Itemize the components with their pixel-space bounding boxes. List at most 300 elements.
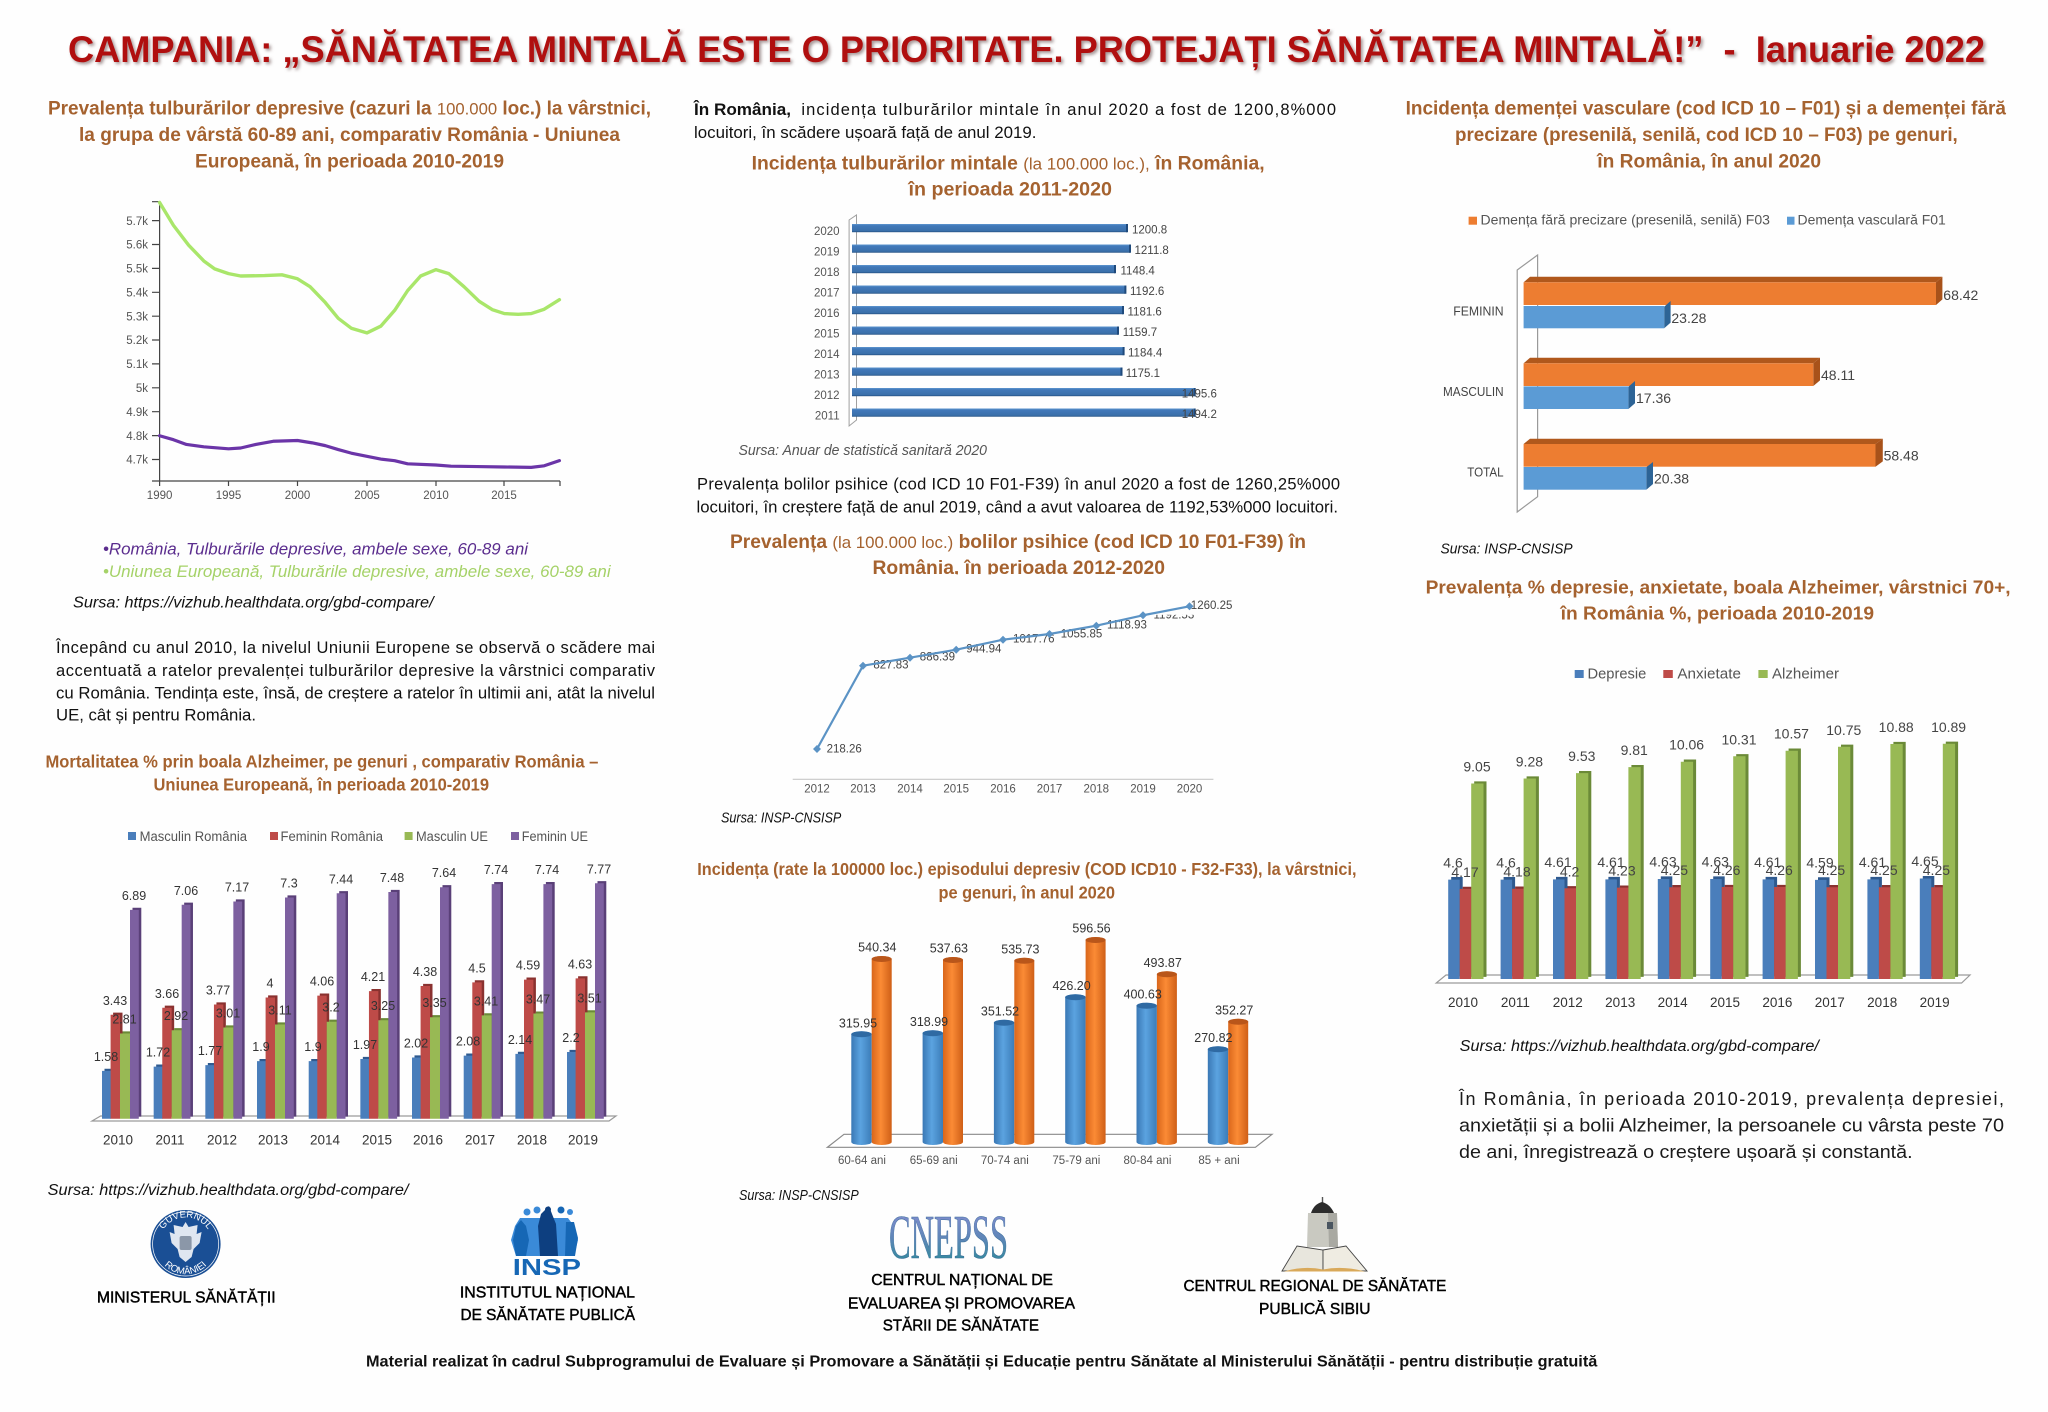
values: Feminin UE: 7.64 bbox=[432, 866, 456, 880]
source: Sursa: INSP-CNSISP bbox=[739, 1188, 859, 1204]
label: MINISTERUL SĂNĂTĂȚII bbox=[97, 1288, 276, 1307]
values: Feminin România: 4.59 bbox=[516, 959, 540, 973]
values: 23.28 bbox=[1671, 310, 1707, 326]
label bbox=[1184, 1276, 1446, 1318]
footer note: Material realizat în cadrul Subprogramului de Evaluare și Promovare a Sănătății și Educație pentru Sănătate al Ministerului Sănătății - pentru distribuție gratuită bbox=[366, 1354, 1598, 1371]
line chart: EU vs Romania: 5.5k bbox=[126, 264, 148, 276]
source: Sursa: Anuar de statistică sanitară 2020 bbox=[738, 443, 987, 459]
values: Feminin UE bbox=[122, 862, 611, 903]
values: 886.39 bbox=[920, 651, 955, 663]
values: Masculin UE: 3.35 bbox=[422, 996, 447, 1010]
heading: dementia: Incidența demenței vasculare (cod ICD 10 – F01) și a demenței fără bbox=[1406, 98, 2006, 119]
label: EVALUAREA ȘI PROMOVAREA bbox=[848, 1295, 1075, 1312]
values: 493.87 bbox=[1144, 956, 1182, 970]
bar chart: prevalence 70+ bbox=[1436, 719, 1970, 1010]
values: 1184.4 bbox=[1128, 347, 1163, 359]
axis: years: 2018 bbox=[1084, 784, 1109, 796]
line chart: EU vs Romania: 4.9k bbox=[126, 407, 148, 419]
values: Alzheimer: 9.81 bbox=[1621, 742, 1648, 758]
values: 48.11 bbox=[1821, 367, 1855, 383]
panel: psychiatric prevalence line chart bbox=[721, 532, 1306, 827]
line chart: EU vs Romania: 2010 bbox=[423, 490, 449, 502]
axis: years: 2017 bbox=[1037, 784, 1062, 796]
legend: Alzheimer chart bbox=[128, 829, 588, 844]
text block: conclusion: de ani, înregistrează o creștere ușoară și constantă. bbox=[1459, 1142, 1913, 1162]
icon: INSP people: INSP bbox=[513, 1254, 581, 1280]
values: Anxietate: 4.25 bbox=[1870, 862, 1898, 878]
values: Anxietate: 4.18 bbox=[1503, 864, 1531, 880]
axis: years bbox=[814, 226, 840, 422]
values: Masculin România bbox=[94, 1031, 580, 1064]
heading: psychiatric prevalence: România, în perioada 2012-2020 bbox=[872, 558, 1165, 579]
panel: mental disorders incidence bars bbox=[738, 153, 1265, 459]
axis: years: 2012 bbox=[804, 784, 830, 796]
axis: years: 2020 bbox=[814, 226, 840, 238]
heading: depressive episode: Incidența (rate la 100000 loc.) episodului depresiv (COD ICD10 - F32-F33), la vârstnici, bbox=[697, 859, 1356, 879]
values: Masculin UE bbox=[112, 991, 602, 1027]
values: 1017.76 bbox=[1013, 633, 1055, 645]
axis: years: 2018 bbox=[517, 1132, 547, 1147]
axis: years: 2014 bbox=[310, 1132, 341, 1147]
values: Masculin UE: 3.51 bbox=[577, 991, 602, 1005]
legend: line chart: •Uniunea Europeană, Tulburările depresive, ambele sexe, 60-89 ani bbox=[103, 563, 612, 581]
line chart: EU vs Romania: 5.4k bbox=[126, 288, 148, 300]
heading: prevalence 70+: în România %, perioada 2010-2019 bbox=[1560, 602, 1874, 623]
values: Depresie: 4.65 bbox=[1911, 853, 1939, 869]
values: 218.26 bbox=[827, 743, 862, 755]
logo block: INSP bbox=[460, 1206, 635, 1324]
heading: psychiatric prevalence bbox=[730, 532, 1306, 582]
axis: years: 2014 bbox=[897, 784, 923, 796]
values: Depresie: 4.63 bbox=[1702, 854, 1729, 870]
axis: age groups: 65-69 ani bbox=[910, 1155, 958, 1167]
values: Alzheimer: 9.53 bbox=[1568, 748, 1596, 764]
values: Feminin UE: 7.48 bbox=[380, 871, 404, 885]
legend: prevalence 70+ bbox=[1575, 667, 1839, 683]
legend: prevalence 70+: Depresie bbox=[1588, 667, 1646, 683]
heading: depressive disorders: Europeană, în perioada 2010-2019 bbox=[195, 152, 504, 173]
values: Depresie: 4.59 bbox=[1806, 854, 1834, 870]
values: Masculin UE: 3.01 bbox=[216, 1006, 240, 1020]
values: Anxietate: 4.17 bbox=[1451, 864, 1479, 880]
heading: depressive disorders: la grupa de vârstă 60-89 ani, comparativ România - Uniunea bbox=[79, 125, 620, 146]
values: Feminin UE: 7.3 bbox=[280, 876, 298, 890]
icon: government seal bbox=[150, 1210, 221, 1278]
title: CAMPANIA: „SĂNĂTATEA MINTALĂ ESTE O PRIORITATE. PROTEJAȚI SĂNĂTATEA MINTALĂ!” - Ianuarie 2022 bbox=[68, 29, 1985, 71]
axis: years: 2012 bbox=[814, 390, 840, 402]
values: Masculin UE: 3.2 bbox=[322, 1001, 340, 1015]
legend: prevalence 70+: Alzheimer bbox=[1772, 667, 1839, 683]
values: Alzheimer: 10.57 bbox=[1774, 726, 1809, 742]
text block: EU trend commentary: cu România. Tendința este, însă, de creștere a ratelor în ultimii ani, atât la nivelul bbox=[56, 684, 655, 702]
values bbox=[1120, 224, 1217, 421]
axis: years: 2012 bbox=[1553, 995, 1583, 1010]
icon: CNEPSS wordmark: CNEPSS bbox=[889, 1204, 1008, 1272]
text block: conclusion: anxietății și a bolii Alzheimer, la persoanele cu vârsta peste 70 bbox=[1459, 1115, 2004, 1135]
line chart: EU vs Romania: 5.3k bbox=[126, 311, 148, 323]
values: Feminin România: 4.63 bbox=[568, 957, 592, 971]
axis: years: 2014 bbox=[1658, 995, 1688, 1010]
values: Feminin România: 3.43 bbox=[103, 994, 127, 1008]
group: Total bbox=[1524, 439, 1883, 490]
axis: years bbox=[804, 784, 1202, 796]
values: Depresie: 4.61 bbox=[1859, 854, 1886, 870]
values: Masculin România: 1.97 bbox=[353, 1038, 377, 1052]
legend: line chart bbox=[103, 540, 612, 581]
group: Masculin bbox=[1524, 358, 1820, 409]
series: Feminin UE bbox=[130, 881, 606, 1119]
values: Alzheimer bbox=[1463, 719, 1966, 774]
axis: years: 2011 bbox=[155, 1132, 185, 1147]
line chart: EU vs Romania: 2015 bbox=[491, 490, 517, 502]
series: Masculin UE bbox=[120, 1010, 598, 1119]
text block: EU trend commentary: accentuată a ratelor prevalenței tulburărilor depresive la vârstnici comparativ bbox=[56, 662, 656, 680]
axis: years: 2015 bbox=[1710, 995, 1740, 1010]
values: Anxietate bbox=[1451, 862, 1950, 880]
panel: dementia horizontal bars bbox=[1406, 98, 2006, 557]
values: 351.52 bbox=[981, 1005, 1019, 1019]
heading: Alzheimer mortality bbox=[46, 752, 599, 795]
legend: Alzheimer chart: Masculin România bbox=[140, 829, 247, 844]
values: Masculin România: 1.77 bbox=[198, 1044, 222, 1058]
axis: years: 2016 bbox=[1762, 995, 1792, 1010]
values: Masculin România: 2.14 bbox=[508, 1033, 532, 1047]
cylinder chart: incidence by age bbox=[827, 922, 1272, 1167]
heading: mental disorders incidence: Incidența tulburărilor mintale (la 100.000 loc.), în România, bbox=[752, 153, 1265, 174]
icon: government seal: ROMÂNIEI bbox=[164, 1260, 206, 1274]
axis: age groups bbox=[838, 1155, 1240, 1167]
values: Feminin România: 4.38 bbox=[413, 965, 437, 979]
values: 17.36 bbox=[1636, 390, 1671, 406]
line chart: EU vs Romania: 1995 bbox=[216, 490, 241, 502]
axis: years: 2015 bbox=[814, 328, 840, 340]
text block: EU trend commentary: Începând cu anul 2010, la nivelul Uniunii Europene se observă o scădere mai bbox=[55, 638, 655, 657]
text block: conclusion: În România, în perioada 2010-2019, prevalența depresiei, bbox=[1458, 1089, 2004, 1109]
values: Masculin UE: 3.25 bbox=[371, 999, 395, 1013]
axis: years: 2019 bbox=[814, 246, 840, 258]
values: 1175.1 bbox=[1126, 368, 1160, 380]
axis: years: 2012 bbox=[207, 1132, 237, 1147]
logo block: Ministerul Sănătății bbox=[97, 1210, 276, 1307]
series: Masculin România bbox=[102, 1050, 578, 1119]
values: Masculin UE: 2.92 bbox=[164, 1009, 188, 1023]
values: Feminin UE: 7.74 bbox=[484, 863, 508, 877]
source: Sursa: https://vizhub.healthdata.org/gbd-compare/ bbox=[48, 1182, 410, 1199]
values: Anxietate: 4.26 bbox=[1713, 862, 1741, 878]
values: 1260.25 bbox=[1191, 600, 1232, 612]
values: 827.83 bbox=[873, 659, 909, 671]
values: 352.27 bbox=[1215, 1004, 1253, 1018]
axis: years: 2018 bbox=[814, 267, 840, 279]
values: Alzheimer: 10.88 bbox=[1879, 719, 1914, 735]
values: 1055.85 bbox=[1061, 628, 1102, 640]
axis: years: 2017 bbox=[465, 1132, 495, 1147]
values: Feminin UE: 6.89 bbox=[122, 889, 146, 903]
values: Feminin România: 3.77 bbox=[206, 984, 230, 998]
values: Alzheimer: 10.75 bbox=[1826, 722, 1862, 738]
axis: years: 2013 bbox=[814, 370, 840, 382]
horizontal bar chart: incidence 2011-2020 bbox=[814, 215, 1217, 426]
values: Feminin UE: 7.06 bbox=[174, 884, 198, 898]
values: Anxietate: 4.23 bbox=[1608, 863, 1636, 879]
line chart: EU vs Romania: 2005 bbox=[354, 490, 380, 502]
axis: years: 2014 bbox=[814, 349, 840, 361]
heading: dementia: în România, în anul 2020 bbox=[1596, 152, 1821, 173]
series: Uniunea Europeană bbox=[160, 202, 559, 333]
values: 1495.6 bbox=[1182, 388, 1217, 400]
values: Depresie: 4.61 bbox=[1544, 854, 1572, 870]
axis: years: 2013 bbox=[258, 1132, 288, 1147]
heading: depressive episode: pe genuri, în anul 2020 bbox=[938, 882, 1115, 902]
text block: incidence 2020: incidența tulburărilor mintale în anul 2020 a fost de 1200,8%000 bbox=[801, 101, 1336, 119]
values: 58.48 bbox=[1884, 448, 1919, 464]
axis: years bbox=[1448, 995, 1950, 1010]
text block: incidence 2020: locuitori, în scădere ușoară față de anul 2019. bbox=[694, 124, 1036, 142]
axis: age groups: 70-74 ani bbox=[981, 1155, 1029, 1167]
values: 315.95 bbox=[839, 1017, 877, 1031]
values: Anxietate: 4.2 bbox=[1560, 863, 1580, 879]
axis: years: 2017 bbox=[1815, 995, 1845, 1010]
axis: years bbox=[103, 1132, 598, 1147]
label: CENTRUL NAȚIONAL DE bbox=[871, 1272, 1053, 1289]
text block: conclusion bbox=[1458, 1089, 2004, 1162]
values: Anxietate: 4.25 bbox=[1923, 862, 1950, 878]
series: men bbox=[851, 994, 1228, 1145]
values: 20.38 bbox=[1654, 471, 1689, 487]
values: Masculin România: 2.2 bbox=[562, 1031, 580, 1045]
legend: prevalence 70+: Anxietate bbox=[1677, 667, 1741, 683]
text block: EU trend commentary: UE, cât și pentru România. bbox=[56, 707, 256, 725]
values bbox=[827, 600, 1232, 755]
label bbox=[848, 1272, 1075, 1335]
axis: years: 2019 bbox=[1130, 784, 1156, 796]
values: 537.63 bbox=[930, 942, 968, 956]
label: INSTITUTUL NAȚIONAL bbox=[460, 1284, 635, 1301]
axis: years: 2019 bbox=[1920, 995, 1950, 1010]
axis: categories: MASCULIN bbox=[1443, 385, 1504, 399]
legend: line chart: •România, Tulburările depresive, ambele sexe, 60-89 ani bbox=[103, 540, 529, 558]
values: Alzheimer: 10.06 bbox=[1669, 737, 1704, 753]
values: Feminin România: 3.66 bbox=[155, 987, 179, 1001]
logo block: CNEPSS bbox=[848, 1204, 1075, 1335]
legend: Alzheimer chart: Masculin UE bbox=[416, 829, 488, 844]
values: 540.34 bbox=[858, 941, 896, 955]
values: 270.82 bbox=[1194, 1031, 1233, 1045]
line chart: EU vs Romania: 2000 bbox=[285, 490, 310, 502]
values: Anxietate: 4.25 bbox=[1818, 862, 1845, 878]
values: Alzheimer: 10.89 bbox=[1931, 719, 1966, 735]
values bbox=[1636, 287, 1979, 487]
heading: dementia: precizare (presenilă, senilă, cod ICD 10 – F03) pe genuri, bbox=[1455, 125, 1958, 146]
series: Feminin România bbox=[111, 976, 587, 1119]
series: Depresie bbox=[1448, 876, 1934, 979]
bar chart: Alzheimer mortality bbox=[92, 862, 616, 1147]
heading: prevalence 70+ bbox=[1426, 577, 2011, 623]
axis: years: 2019 bbox=[568, 1132, 598, 1147]
text block: prevalence 2020: Prevalența bolilor psihice (cod ICD 10 F01-F39) în anul 2020 a fost de 1260,25%000 bbox=[697, 475, 1340, 493]
series: Alzheimer bbox=[1471, 742, 1958, 979]
axis: categories: TOTAL bbox=[1467, 466, 1504, 480]
values: Alzheimer: 10.31 bbox=[1721, 731, 1757, 747]
axis: years: 2013 bbox=[1605, 995, 1635, 1010]
values: 944.94 bbox=[966, 643, 1002, 655]
values: Feminin UE: 7.77 bbox=[587, 862, 611, 876]
icon: tower and book bbox=[1282, 1197, 1367, 1272]
source: Sursa: https://vizhub.healthdata.org/gbd-compare/ bbox=[73, 595, 435, 612]
legend: Alzheimer chart: Feminin România bbox=[280, 829, 383, 844]
values: 535.73 bbox=[1001, 942, 1040, 956]
heading: prevalence 70+: Prevalența % depresie, anxietate, boala Alzheimer, vârstnici 70+, bbox=[1426, 577, 2011, 598]
values: 1211.8 bbox=[1134, 245, 1169, 257]
bar chart: dementia by gender bbox=[1443, 255, 1979, 512]
label: PUBLICĂ SIBIU bbox=[1259, 1299, 1370, 1318]
label bbox=[460, 1284, 635, 1324]
values: Masculin România: 1.72 bbox=[146, 1046, 170, 1060]
axis: years: 2011 bbox=[1501, 995, 1530, 1010]
values: 1118.93 bbox=[1107, 619, 1147, 631]
line chart: EU vs Romania: 1990 bbox=[147, 490, 172, 502]
line chart: EU vs Romania: 5.1k bbox=[126, 359, 148, 371]
axis: age groups: 85 + ani bbox=[1198, 1155, 1240, 1167]
panel: depressive episode cylinder chart bbox=[697, 859, 1356, 1204]
axis: years: 2010 bbox=[103, 1132, 133, 1147]
values: Depresie: 4.63 bbox=[1649, 854, 1677, 870]
group: Feminin bbox=[1524, 277, 1942, 328]
series: Anxietate bbox=[1460, 885, 1946, 979]
values: Anxietate: 4.25 bbox=[1661, 862, 1688, 878]
series: România bbox=[160, 436, 559, 467]
line chart: EU vs Romania bbox=[126, 202, 560, 502]
line chart: EU vs Romania: 5k bbox=[136, 383, 148, 395]
values: 1494.2 bbox=[1182, 409, 1217, 421]
line chart: prevalence 2012-2020 bbox=[793, 600, 1232, 796]
legend: dementia: Demența fără precizare (presenilă, senilă) F03 bbox=[1480, 212, 1770, 227]
line chart: EU vs Romania: 4.7k bbox=[126, 455, 148, 467]
values: Masculin UE: 2.81 bbox=[112, 1013, 137, 1027]
text block: prevalence 2020 bbox=[696, 475, 1340, 517]
values: Alzheimer: 9.05 bbox=[1463, 758, 1491, 774]
values: Feminin România bbox=[103, 957, 592, 1008]
heading: depressive episode bbox=[697, 859, 1356, 902]
values bbox=[839, 922, 1253, 1045]
legend: dementia: Demența vasculară F01 bbox=[1798, 212, 1946, 227]
label: STĂRII DE SĂNĂTATE bbox=[883, 1316, 1039, 1335]
values: Alzheimer: 9.28 bbox=[1516, 754, 1543, 770]
axis: years: 2010 bbox=[1448, 995, 1478, 1010]
values: 68.42 bbox=[1943, 287, 1979, 303]
values: 596.56 bbox=[1072, 922, 1111, 936]
icon: government seal: GUVERNUL bbox=[160, 1210, 211, 1230]
line chart: EU vs Romania: 4.8k bbox=[126, 431, 148, 443]
heading: mental disorders incidence bbox=[752, 153, 1265, 201]
values: Feminin UE: 7.44 bbox=[329, 872, 353, 886]
values: Anxietate: 4.26 bbox=[1766, 862, 1793, 878]
source: Sursa: INSP-CNSISP bbox=[1440, 541, 1573, 557]
values: Masculin România: 1.58 bbox=[94, 1050, 118, 1064]
values: Depresie: 4.61 bbox=[1597, 854, 1625, 870]
axis: years: 2020 bbox=[1177, 784, 1202, 796]
panel: Alzheimer mortality bar chart bbox=[46, 752, 616, 1199]
values: Feminin România: 4 bbox=[267, 976, 274, 990]
legend: Alzheimer chart: Feminin UE bbox=[522, 829, 588, 844]
axis: years: 2016 bbox=[413, 1132, 443, 1147]
values: Depresie bbox=[1443, 853, 1939, 871]
values: Feminin România: 4.21 bbox=[361, 970, 385, 984]
values: Masculin UE: 3.11 bbox=[268, 1004, 292, 1018]
axis: years: 2017 bbox=[814, 288, 840, 300]
icon: INSP people bbox=[511, 1206, 581, 1280]
values: Depresie: 4.6 bbox=[1496, 855, 1516, 871]
heading: depressive disorders: Prevalența tulburărilor depresive (cazuri la 100.000 loc.) la vârstnici, bbox=[48, 99, 651, 120]
source: Sursa: INSP-CNSISP bbox=[721, 811, 842, 827]
line chart: EU vs Romania: 5.6k bbox=[126, 240, 148, 252]
heading: psychiatric prevalence: Prevalența (la 100.000 loc.) bolilor psihice (cod ICD 10 F01-F39) în bbox=[730, 532, 1306, 553]
values: 318.99 bbox=[910, 1015, 948, 1029]
values: 400.63 bbox=[1124, 988, 1162, 1002]
values: Feminin UE: 7.17 bbox=[225, 880, 249, 894]
values: 1200.8 bbox=[1132, 224, 1167, 236]
axis: age groups: 75-79 ani bbox=[1052, 1155, 1100, 1167]
heading: depressive disorders bbox=[48, 99, 651, 173]
axis: years: 2016 bbox=[814, 308, 840, 320]
values: 1159.7 bbox=[1123, 327, 1157, 339]
series: women bbox=[872, 937, 1248, 1145]
values: Masculin România: 1.9 bbox=[252, 1040, 270, 1054]
heading: Alzheimer mortality: Mortalitatea % prin boala Alzheimer, pe genuri , comparativ România – bbox=[46, 752, 599, 772]
values: 1192.53 bbox=[1154, 609, 1194, 621]
values: 1148.4 bbox=[1120, 265, 1155, 277]
legend: dementia bbox=[1469, 212, 1946, 227]
axis: age groups: 80-84 ani bbox=[1124, 1155, 1171, 1167]
values: Feminin UE: 7.74 bbox=[535, 863, 559, 877]
text block: prevalence 2020: locuitori, în creștere față de anul 2019, când a avut valoarea de 1192,53%000 locuitori. bbox=[696, 499, 1338, 517]
axis: years: 2015 bbox=[362, 1132, 392, 1147]
axis: years: 2018 bbox=[1867, 995, 1897, 1010]
axis: categories bbox=[1443, 304, 1504, 480]
label: DE SĂNĂTATE PUBLICĂ bbox=[460, 1305, 635, 1324]
label: CENTRUL REGIONAL DE SĂNĂTATE bbox=[1184, 1276, 1446, 1295]
axis: categories: FEMININ bbox=[1453, 304, 1504, 318]
values: Masculin UE: 3.47 bbox=[526, 993, 550, 1007]
values: Depresie: 4.6 bbox=[1443, 855, 1463, 871]
text block: incidence 2020 bbox=[693, 100, 1336, 142]
values: Feminin România: 4.5 bbox=[468, 961, 486, 975]
values: 1181.6 bbox=[1128, 306, 1162, 318]
line chart: EU vs Romania: 5.2k bbox=[126, 335, 148, 347]
values: Masculin România: 1.9 bbox=[304, 1040, 322, 1054]
panel: depressive disorders line chart bbox=[48, 99, 651, 612]
axis: age groups: 60-64 ani bbox=[838, 1155, 886, 1167]
heading: mental disorders incidence: în perioada 2011-2020 bbox=[907, 180, 1112, 201]
heading: Alzheimer mortality: Uniunea Europeană, în perioada 2010-2019 bbox=[154, 775, 489, 795]
axis: years: 2011 bbox=[815, 410, 840, 422]
logo block: Sibiu bbox=[1184, 1197, 1446, 1318]
text block: EU trend commentary bbox=[55, 638, 656, 725]
values: Masculin România: 2.02 bbox=[404, 1036, 428, 1050]
axis: years: 2013 bbox=[850, 784, 876, 796]
axis: years: 2016 bbox=[990, 784, 1016, 796]
panel: depression anxiety Alzheimer bars bbox=[1426, 577, 2011, 1055]
values: Masculin România: 2.08 bbox=[456, 1035, 480, 1049]
values: Depresie: 4.61 bbox=[1754, 854, 1782, 870]
values: 426.20 bbox=[1052, 979, 1091, 993]
axis: years: 2015 bbox=[943, 784, 969, 796]
source: Sursa: https://vizhub.healthdata.org/gbd-compare/ bbox=[1460, 1038, 1821, 1055]
values: Masculin UE: 3.41 bbox=[474, 994, 498, 1008]
line chart: EU vs Romania: 5.7k bbox=[126, 216, 148, 228]
values: 1192.6 bbox=[1130, 286, 1164, 298]
values: Feminin România: 4.06 bbox=[310, 975, 334, 989]
